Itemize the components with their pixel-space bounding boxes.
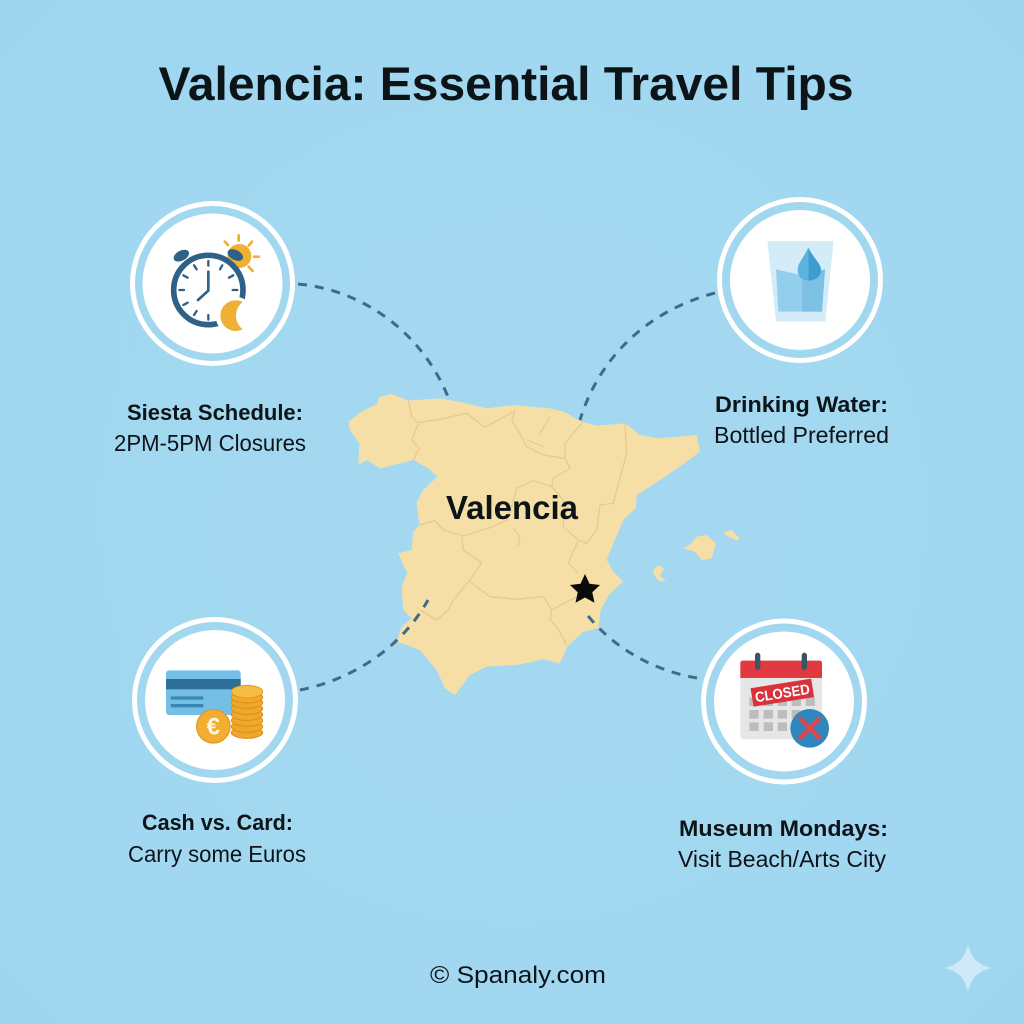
title: Valencia: Essential Travel Tips <box>158 57 854 110</box>
detail: Bottled Preferred <box>714 422 889 448</box>
map of Spain <box>348 394 739 695</box>
panel: museum mondays <box>678 618 888 872</box>
map label: Valencia: Valencia <box>446 489 579 526</box>
dashed connector: siesta <box>298 284 450 402</box>
dashed connector: cash <box>300 600 428 690</box>
panel: siesta schedule <box>114 201 306 456</box>
badge ring <box>130 201 295 366</box>
icon: closed calendar: CLOSED <box>754 682 811 706</box>
label: Cash vs. Card: <box>142 810 293 835</box>
footer credit: © Spanaly.com <box>430 962 606 989</box>
badge ring <box>701 618 867 784</box>
mainland <box>348 394 700 695</box>
icon: closed calendar <box>740 653 829 748</box>
badge ring <box>717 197 883 363</box>
label: Siesta Schedule: <box>127 400 303 425</box>
icon: card and euro coins <box>166 670 263 743</box>
detail: Carry some Euros <box>128 841 306 867</box>
badge ring <box>132 617 298 783</box>
icon: sparkle watermark <box>944 944 992 992</box>
region borders <box>408 401 627 645</box>
dashed connector: museum <box>585 612 697 678</box>
icon: star marker <box>570 574 600 603</box>
panel: drinking water <box>714 197 889 448</box>
icon: alarm clock with sun and moon <box>172 235 259 335</box>
detail: 2PM-5PM Closures <box>114 430 306 456</box>
label: Museum Mondays: <box>679 816 888 841</box>
detail: Visit Beach/Arts City <box>678 846 886 872</box>
icon: glass of water <box>767 241 834 322</box>
dashed connector: water <box>580 293 715 420</box>
balearic islands <box>653 530 739 582</box>
icon: card and euro coins: € <box>207 714 220 741</box>
label: Drinking Water: <box>715 392 888 417</box>
panel: cash vs card <box>128 617 306 867</box>
